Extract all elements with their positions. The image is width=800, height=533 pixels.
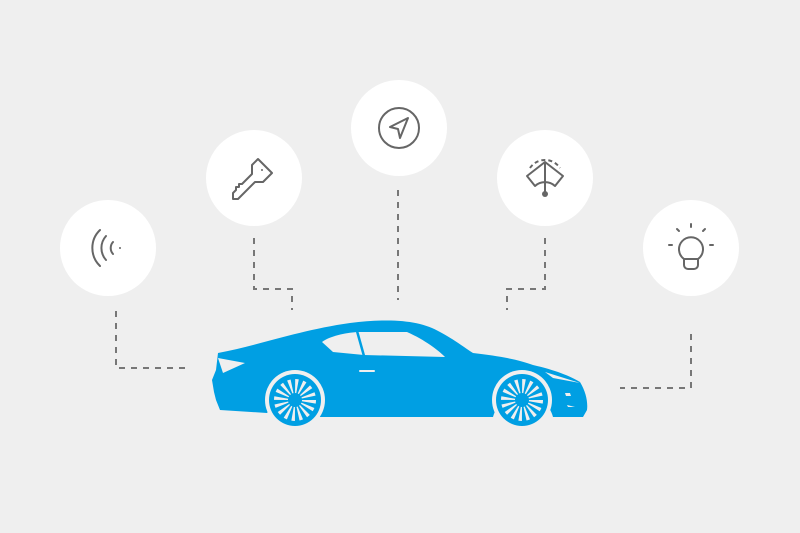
icon circle: navigation (351, 80, 447, 176)
icon circle: bulb (643, 200, 739, 296)
tail light (218, 358, 245, 373)
car (212, 320, 587, 430)
connector: wiper (507, 238, 545, 310)
connector: key (254, 238, 292, 310)
icon circle: wifi (60, 200, 156, 296)
front wheel (492, 370, 552, 430)
connector: navigation (397, 190, 399, 300)
connector: bulb (620, 334, 691, 388)
door handle (360, 370, 374, 372)
icon circle: key (206, 130, 302, 226)
car window (322, 332, 445, 357)
rear wheel (265, 370, 325, 430)
headlight (545, 372, 580, 383)
connector: wifi (116, 311, 190, 368)
icon circle: wiper (497, 130, 593, 226)
